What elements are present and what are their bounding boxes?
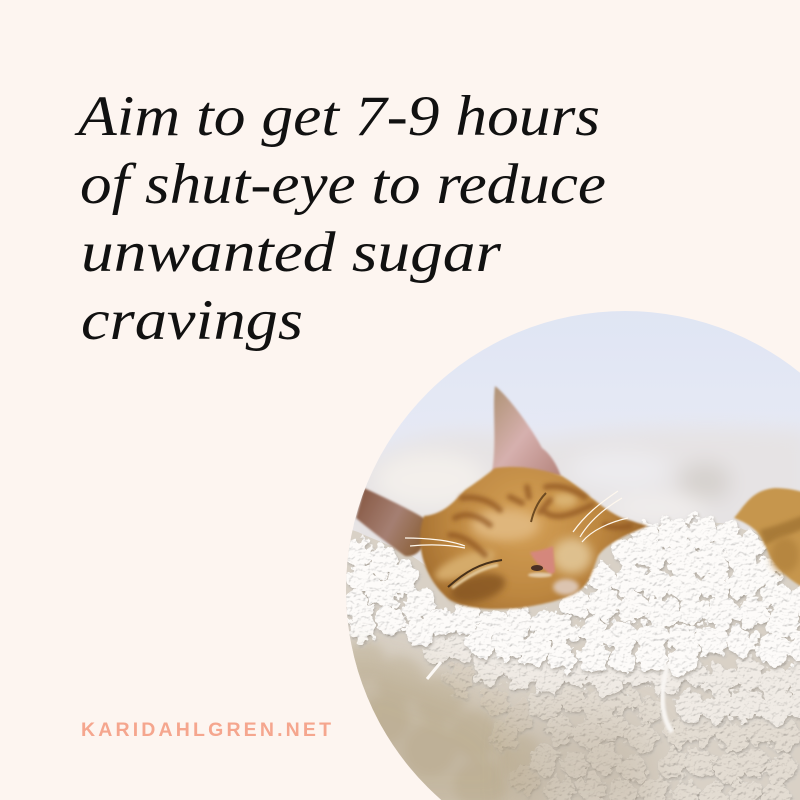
wool tufts: lower, duller bbox=[532, 686, 798, 800]
infographic canvas bbox=[74, 95, 800, 800]
photo background wall bbox=[380, 311, 800, 458]
heading: Aim to get 7-9 hours bbox=[74, 85, 600, 148]
wool tufts: mid band bbox=[427, 631, 800, 721]
heading bbox=[74, 85, 606, 352]
soft out-of-focus wool, lower left bbox=[345, 640, 542, 800]
dark cheek bbox=[448, 568, 508, 608]
whiskers bbox=[405, 491, 628, 548]
blanket base bbox=[340, 522, 800, 800]
heading: cravings bbox=[81, 289, 303, 352]
closed eyes bbox=[448, 560, 502, 587]
dark tabby stripes bbox=[450, 486, 630, 555]
loose yarn strand bbox=[662, 664, 672, 732]
cream eyelid line bbox=[452, 565, 498, 588]
blurred blanket behind the cat bbox=[352, 427, 800, 566]
head bbox=[420, 467, 648, 609]
chin bbox=[553, 579, 579, 595]
heading: of shut-eye to reduce bbox=[80, 153, 606, 216]
stray fibre bbox=[427, 662, 441, 679]
shaded lower-left wool bbox=[335, 655, 545, 800]
left ear bbox=[356, 488, 430, 556]
photo: sleeping ginger cat in a circle bbox=[335, 305, 800, 800]
wool tufts: bright upper band bbox=[346, 518, 800, 673]
light face patches bbox=[552, 538, 592, 574]
cat bbox=[356, 386, 648, 609]
footer website label: KARIDAHLGREN.NET bbox=[81, 719, 331, 741]
nose bbox=[530, 546, 555, 575]
cat paw bbox=[734, 488, 800, 590]
wool tufts: lower-left, muted bbox=[447, 667, 536, 791]
upright ear bbox=[492, 386, 561, 476]
heading: unwanted sugar bbox=[81, 221, 502, 284]
blanket foreground bbox=[335, 518, 800, 800]
